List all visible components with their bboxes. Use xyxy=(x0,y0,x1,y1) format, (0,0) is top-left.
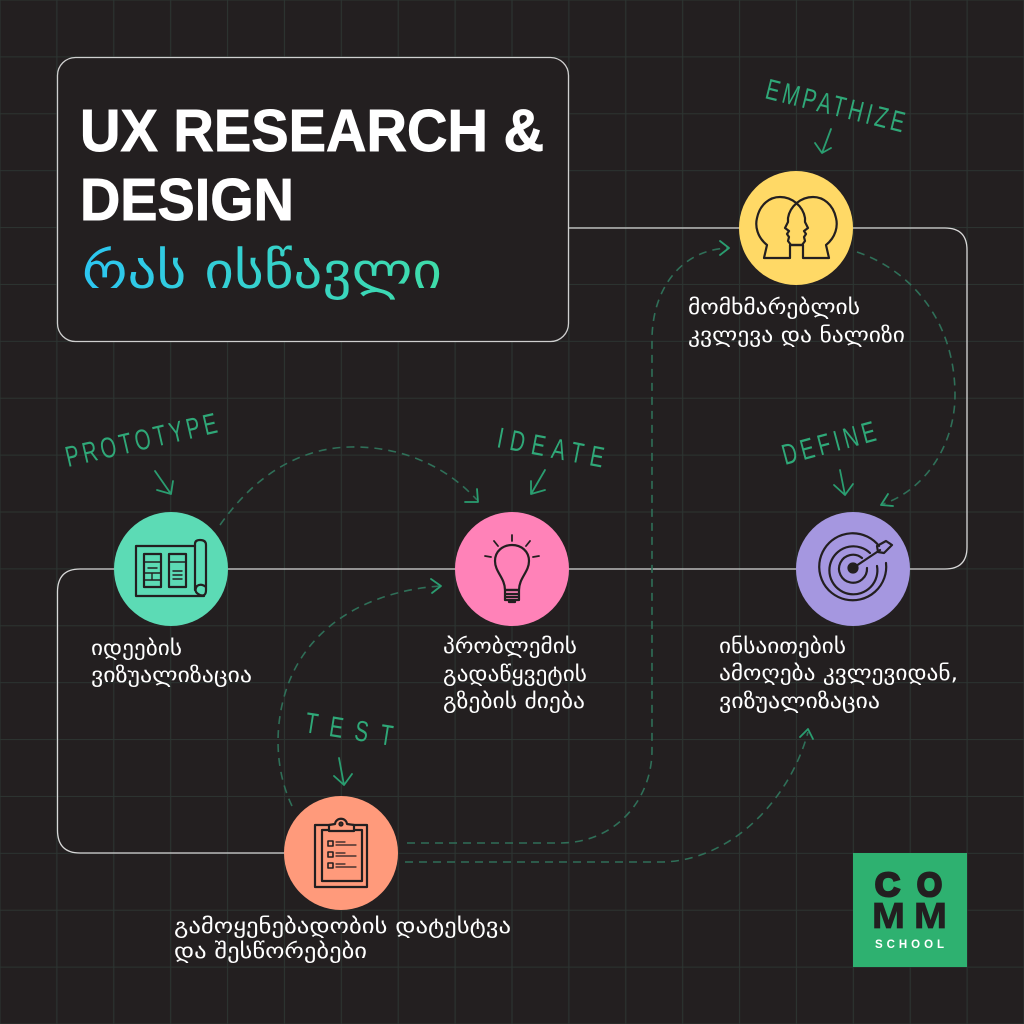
logo: Comm School: M xyxy=(872,895,905,936)
step: test xyxy=(174,707,511,963)
icon: two heads xyxy=(756,197,837,258)
circle: test xyxy=(284,796,398,910)
text: test xyxy=(174,914,511,963)
hand arrow: prototype xyxy=(155,471,173,494)
text: define: ვიზუალიზაცია xyxy=(719,689,880,713)
text: prototype: იდეების xyxy=(91,636,182,660)
hand arrow: ideate xyxy=(531,470,545,494)
label: empathize: EMPATHIZE xyxy=(762,73,908,139)
label: define: DEFINE xyxy=(778,416,879,472)
dashed arrow: test to define xyxy=(405,729,813,862)
text: test: გამოყენებადობის დატესტვა xyxy=(174,914,511,938)
logo: Comm School: SCHOOL xyxy=(875,939,944,951)
step: prototype xyxy=(62,407,252,687)
hand arrow: empathize xyxy=(815,129,831,153)
title: Georgian subtitle: რას ისწავლი xyxy=(82,242,442,300)
circle: prototype xyxy=(114,512,228,626)
text: define: ინსაითების xyxy=(719,634,846,658)
logo: Comm School: C xyxy=(875,866,900,903)
hand arrow: test xyxy=(334,758,352,785)
logo: Comm School xyxy=(853,853,967,967)
text: empathize: მომხმარებლის xyxy=(688,295,860,319)
text: ideate: პრობლემის xyxy=(443,634,577,658)
dashed arrow: test to ideate xyxy=(278,579,441,806)
text: prototype: ვიზუალიზაცია xyxy=(91,663,252,687)
title panel xyxy=(58,58,568,342)
dashed arrow: empathize to define xyxy=(857,252,955,506)
circle: ideate xyxy=(455,512,569,626)
text: define: ამოღება კვლევიდან, xyxy=(719,661,958,685)
label: ideate: IDEATE xyxy=(495,422,607,474)
connector path xyxy=(58,228,967,853)
title: second line: DESIGN xyxy=(80,167,294,233)
text: ideate: გადაწყვეტის xyxy=(443,662,587,686)
icon: clipboard xyxy=(315,819,367,887)
dashed arrow: prototype to ideate xyxy=(220,447,478,525)
text: test: და შესწორებები xyxy=(174,939,367,963)
circle: define xyxy=(796,512,910,626)
dashed arrow: test to empathize xyxy=(407,241,729,843)
step: define xyxy=(719,416,958,713)
text: empathize: კვლევა და ნალიზი xyxy=(688,323,905,347)
logo: Comm School: O xyxy=(917,866,942,903)
icon: light bulb xyxy=(485,535,539,602)
title: English: UX RESEARCH & xyxy=(80,98,544,164)
circle: empathize xyxy=(739,171,853,285)
text: empathize xyxy=(688,295,905,347)
text: ideate: გზების ძიება xyxy=(443,689,585,713)
text: prototype xyxy=(91,636,252,687)
label: prototype: PROTOTYPE xyxy=(62,407,220,474)
logo: Comm School: M xyxy=(914,895,947,936)
step: empathize xyxy=(688,73,908,347)
text: define xyxy=(719,634,958,713)
hand arrow: define xyxy=(834,470,853,495)
text: ideate xyxy=(443,634,587,713)
icon: blueprint xyxy=(136,540,206,596)
step: ideate xyxy=(443,422,607,713)
icon: target xyxy=(819,533,892,600)
label: test: TEST xyxy=(303,707,395,753)
